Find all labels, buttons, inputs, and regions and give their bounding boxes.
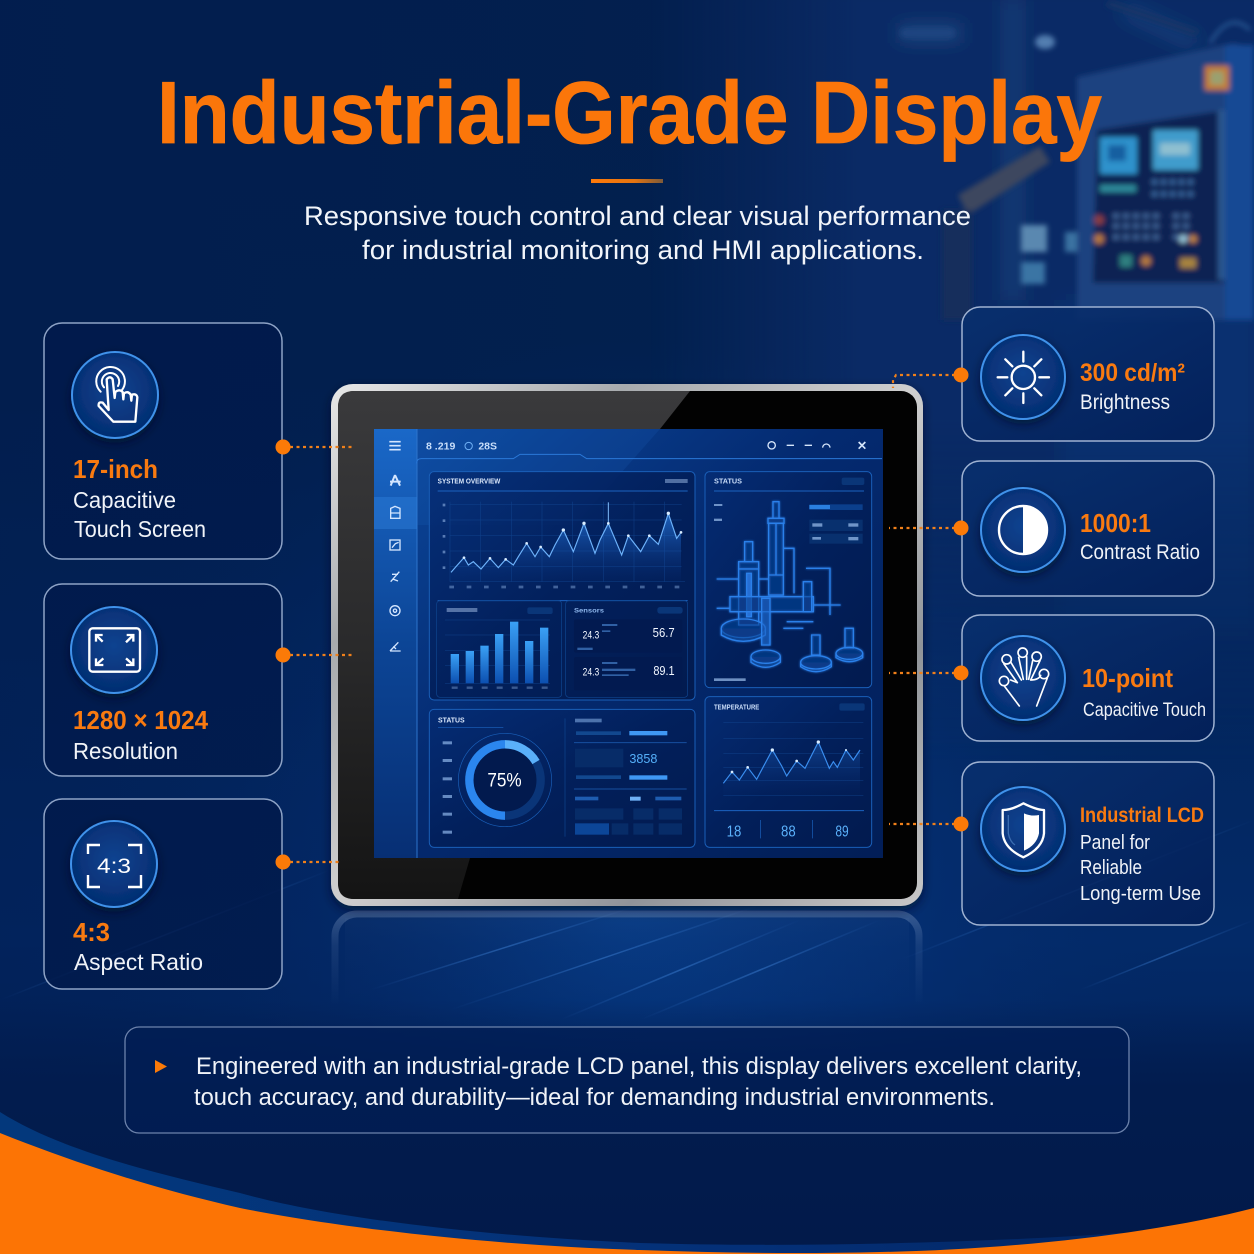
card text: 10-point: [1082, 663, 1206, 721]
top bar status text: [426, 441, 497, 452]
card text: 17-inch: [73, 454, 206, 542]
panel: readings: 56.7: [653, 626, 675, 640]
connector: resolution: [276, 648, 355, 662]
panel: readings: 24.3: [583, 629, 599, 641]
card text: resolution: 1280 × 1024: [73, 705, 208, 735]
panel: 17-inch touch screen: [44, 323, 290, 559]
connector: 10-point: [889, 672, 955, 674]
icon: orange arrow: [155, 1060, 167, 1073]
card text: industrial LCD: Industrial LCD: [1080, 804, 1204, 827]
panel: status equipment diagram: STATUS: [714, 476, 742, 485]
card text: 17-inch: Touch Screen: [74, 516, 206, 542]
callout: summary: [125, 1027, 1129, 1133]
card text: resolution: Resolution: [73, 738, 178, 764]
card text: 10-point: 10-point: [1082, 663, 1173, 693]
icon: shield: [1003, 803, 1044, 857]
subtitle: Responsive touch control and clear visual performance: [304, 201, 971, 231]
temperature readouts: 18: [727, 824, 741, 841]
screen upper layout: [389, 441, 882, 700]
icon: contrast: [999, 506, 1047, 554]
icon: expand frame: [89, 628, 140, 672]
icon: multi-touch hand: [999, 648, 1049, 706]
callout text: touch accuracy, and durability—ideal for demanding industrial environments.: [194, 1084, 995, 1111]
card text: resolution: [73, 705, 208, 764]
temperature readouts: [727, 824, 849, 841]
donut gauge: 75%: [487, 771, 522, 792]
card text: brightness: Brightness: [1080, 390, 1170, 414]
panel: brightness: [954, 307, 1214, 441]
panel: aspect ratio: [44, 799, 290, 989]
card text: industrial LCD: [1080, 804, 1204, 905]
callout text: [194, 1053, 1082, 1111]
card text: 17-inch: 17-inch: [73, 454, 158, 484]
card text: brightness: 300 cd/m²: [1080, 359, 1185, 387]
status readout rows: 3858: [629, 752, 657, 766]
title divider: [591, 179, 663, 183]
icon: 4:3 frame: 4:3: [97, 855, 131, 878]
panel: readings: Sensors: [574, 608, 605, 614]
panel: 10-point touch: [954, 615, 1214, 741]
temperature readouts: 89: [835, 824, 849, 841]
card text: 10-point: Capacitive Touch: [1083, 699, 1206, 721]
panel: industrial LCD: [954, 762, 1214, 925]
card text: contrast ratio: Contrast Ratio: [1080, 540, 1200, 564]
monitor screen: [374, 429, 883, 858]
panel: readings: [566, 601, 688, 697]
card text: industrial LCD: Reliable: [1080, 856, 1142, 879]
bottom orange wave: [0, 1112, 1254, 1254]
monitor: [331, 384, 923, 906]
screen lower layout: [429, 697, 872, 847]
icon: plant equipment: [717, 502, 863, 672]
connector: industrial LCD: [889, 823, 955, 825]
icon: 4:3 frame: [88, 845, 141, 887]
icon: sun: [998, 352, 1049, 403]
callout text: Engineered with an industrial-grade LCD panel, this display delivers excellent clarity,: [196, 1053, 1082, 1080]
card text: industrial LCD: Long-term Use: [1080, 882, 1201, 905]
temperature readouts: 88: [781, 824, 796, 841]
panel: readings: 89.1: [653, 664, 675, 678]
panel: resolution: [44, 584, 290, 776]
temperature line chart: [723, 740, 860, 795]
panel: status gauge: STATUS: [438, 715, 465, 724]
panel: status gauge: [429, 709, 695, 847]
icon: touch hand: [96, 367, 137, 422]
line chart: [444, 502, 685, 587]
card text: contrast ratio: 1000:1: [1080, 508, 1151, 538]
top bar status text: 8 .219: [426, 441, 456, 452]
card text: brightness: [1080, 359, 1185, 414]
panel: bar chart: [437, 601, 562, 697]
connector: contrast: [889, 527, 955, 529]
title: Industrial-Grade Display: [157, 63, 1102, 162]
subtitle: for industrial monitoring and HMI applications.: [362, 235, 924, 265]
panel: contrast ratio: [954, 461, 1214, 596]
subtitle: [304, 201, 971, 265]
panel: readings: 24.3: [583, 667, 599, 679]
panel: temperature: TEMPERATURE: [714, 704, 760, 711]
background factory machine: [732, 0, 1254, 624]
connector: 17-inch: [276, 440, 355, 454]
top bar icons: [768, 442, 865, 449]
donut gauge: [458, 733, 552, 827]
panel: status equipment diagram: [705, 472, 872, 688]
card text: contrast ratio: [1080, 508, 1200, 564]
sidebar menu icon: [389, 442, 401, 450]
panel: system overview: SYSTEM OVERVIEW: [438, 476, 500, 485]
panel: temperature: [705, 697, 872, 847]
monitor reflection: [335, 914, 919, 1114]
card text: industrial LCD: Panel for: [1080, 831, 1150, 854]
card text: aspect ratio: Aspect Ratio: [74, 949, 203, 975]
card text: aspect ratio: 4:3: [73, 917, 110, 947]
card text: aspect ratio: [73, 917, 203, 975]
top bar status text: 28S: [478, 441, 497, 452]
status readout rows: [574, 719, 687, 835]
panel: system overview: [429, 472, 695, 700]
connector: brightness: [893, 375, 955, 388]
card text: 17-inch: Capacitive: [73, 487, 176, 513]
connector: aspect ratio: [276, 854, 340, 870]
